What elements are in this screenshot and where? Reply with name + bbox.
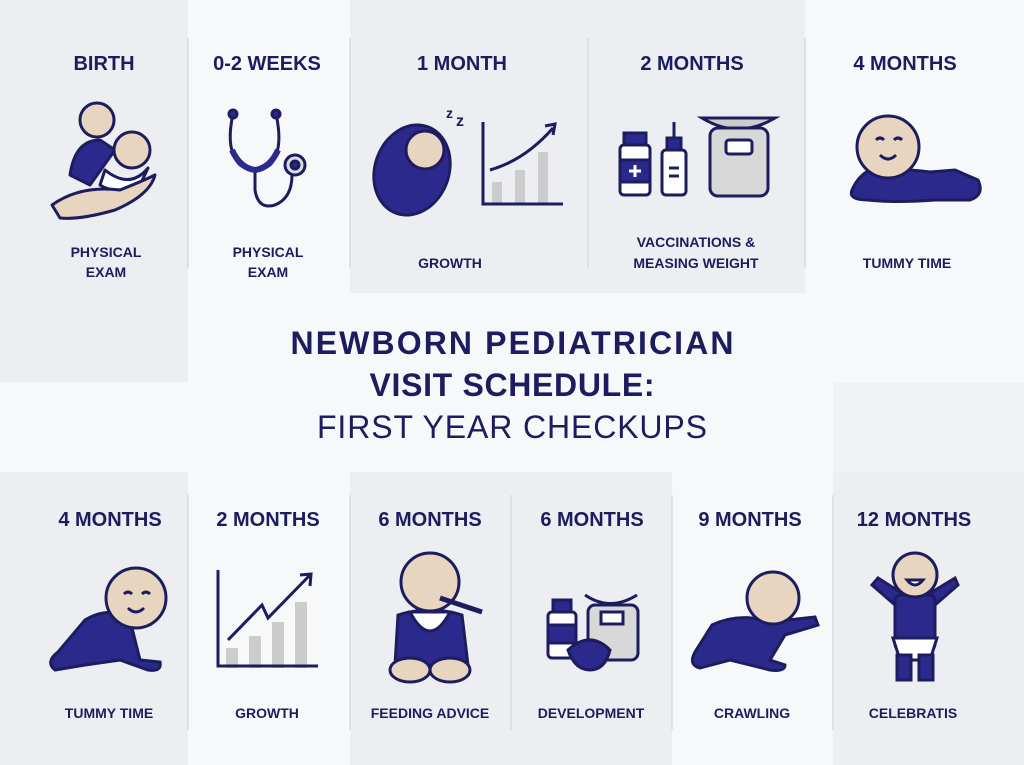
icon: swaddled baby and growth chart [361, 105, 563, 226]
icon: swaddled baby and growth chart: z [446, 105, 453, 121]
panel: 2 months bottom: 2 MONTHS [216, 509, 320, 531]
panel: 0-2 weeks: 0-2 WEEKS [213, 53, 321, 75]
panel: 4 months bottom: 4 MONTHS [58, 509, 162, 531]
panel: 0-2 weeks [213, 53, 321, 280]
panel: 6 months feeding: FEEDING ADVICE [371, 705, 489, 721]
icon: baby celebrating [872, 553, 958, 680]
panel: 2 months: 2 MONTHS [640, 53, 744, 75]
panel: 6 months feeding: 6 MONTHS [378, 509, 482, 531]
icon: crawling baby [51, 568, 166, 670]
panel: 2 months bottom [216, 509, 320, 721]
panel: birth: EXAM [86, 264, 126, 280]
panel: 6 months development [538, 509, 645, 721]
panel: 4 months top [851, 53, 980, 271]
panel: 2 months bottom: GROWTH [235, 705, 299, 721]
panel: 12 months: CELEBRATIS [869, 705, 957, 721]
icon: crawling baby pointing [692, 572, 818, 670]
icon: parent holding baby [52, 103, 155, 218]
panel: 12 months: 12 MONTHS [857, 509, 971, 531]
icon: growth chart [218, 570, 318, 668]
icon: stethoscope [229, 110, 305, 206]
panel: 4 months top: 4 MONTHS [853, 53, 957, 75]
icon: swaddled baby and growth chart: z [456, 113, 464, 130]
panel: 9 months [692, 509, 818, 721]
panel: 12 months [857, 509, 971, 721]
panel: 6 months development: 6 MONTHS [540, 509, 644, 531]
panel: birth: PHYSICAL [71, 244, 142, 260]
title: NEWBORN PEDIATRICIAN [290, 325, 734, 361]
panel: 4 months bottom: TUMMY TIME [65, 705, 153, 721]
title: VISIT SCHEDULE: [370, 367, 654, 403]
panel: 2 months: MEASING WEIGHT [633, 255, 759, 271]
panel: 4 months bottom [51, 509, 166, 721]
panel: birth: BIRTH [73, 53, 135, 75]
icon: bottle, scale, bowl [548, 595, 638, 670]
panel: 6 months development: DEVELOPMENT [538, 705, 645, 721]
icon: baby tummy time [851, 116, 980, 202]
icon: vaccine bottles and scale [620, 118, 775, 196]
title: FIRST YEAR CHECKUPS [317, 409, 707, 445]
panel: birth [52, 53, 155, 280]
panel: 1 month: GROWTH [418, 255, 482, 271]
panel: 1 month: 1 MONTH [417, 53, 507, 75]
panel: 0-2 weeks: EXAM [248, 264, 288, 280]
panel: 2 months [620, 53, 775, 271]
panel: 6 months feeding [371, 509, 489, 721]
panel: 4 months top: TUMMY TIME [863, 255, 951, 271]
title [290, 325, 734, 445]
icon: baby eating [390, 553, 482, 682]
panel: 0-2 weeks: PHYSICAL [233, 244, 304, 260]
panel: 9 months: CRAWLING [714, 705, 790, 721]
panel: 1 month [361, 53, 563, 271]
panel: 2 months: VACCINATIONS & [637, 234, 755, 250]
panel: 9 months: 9 MONTHS [698, 509, 802, 531]
